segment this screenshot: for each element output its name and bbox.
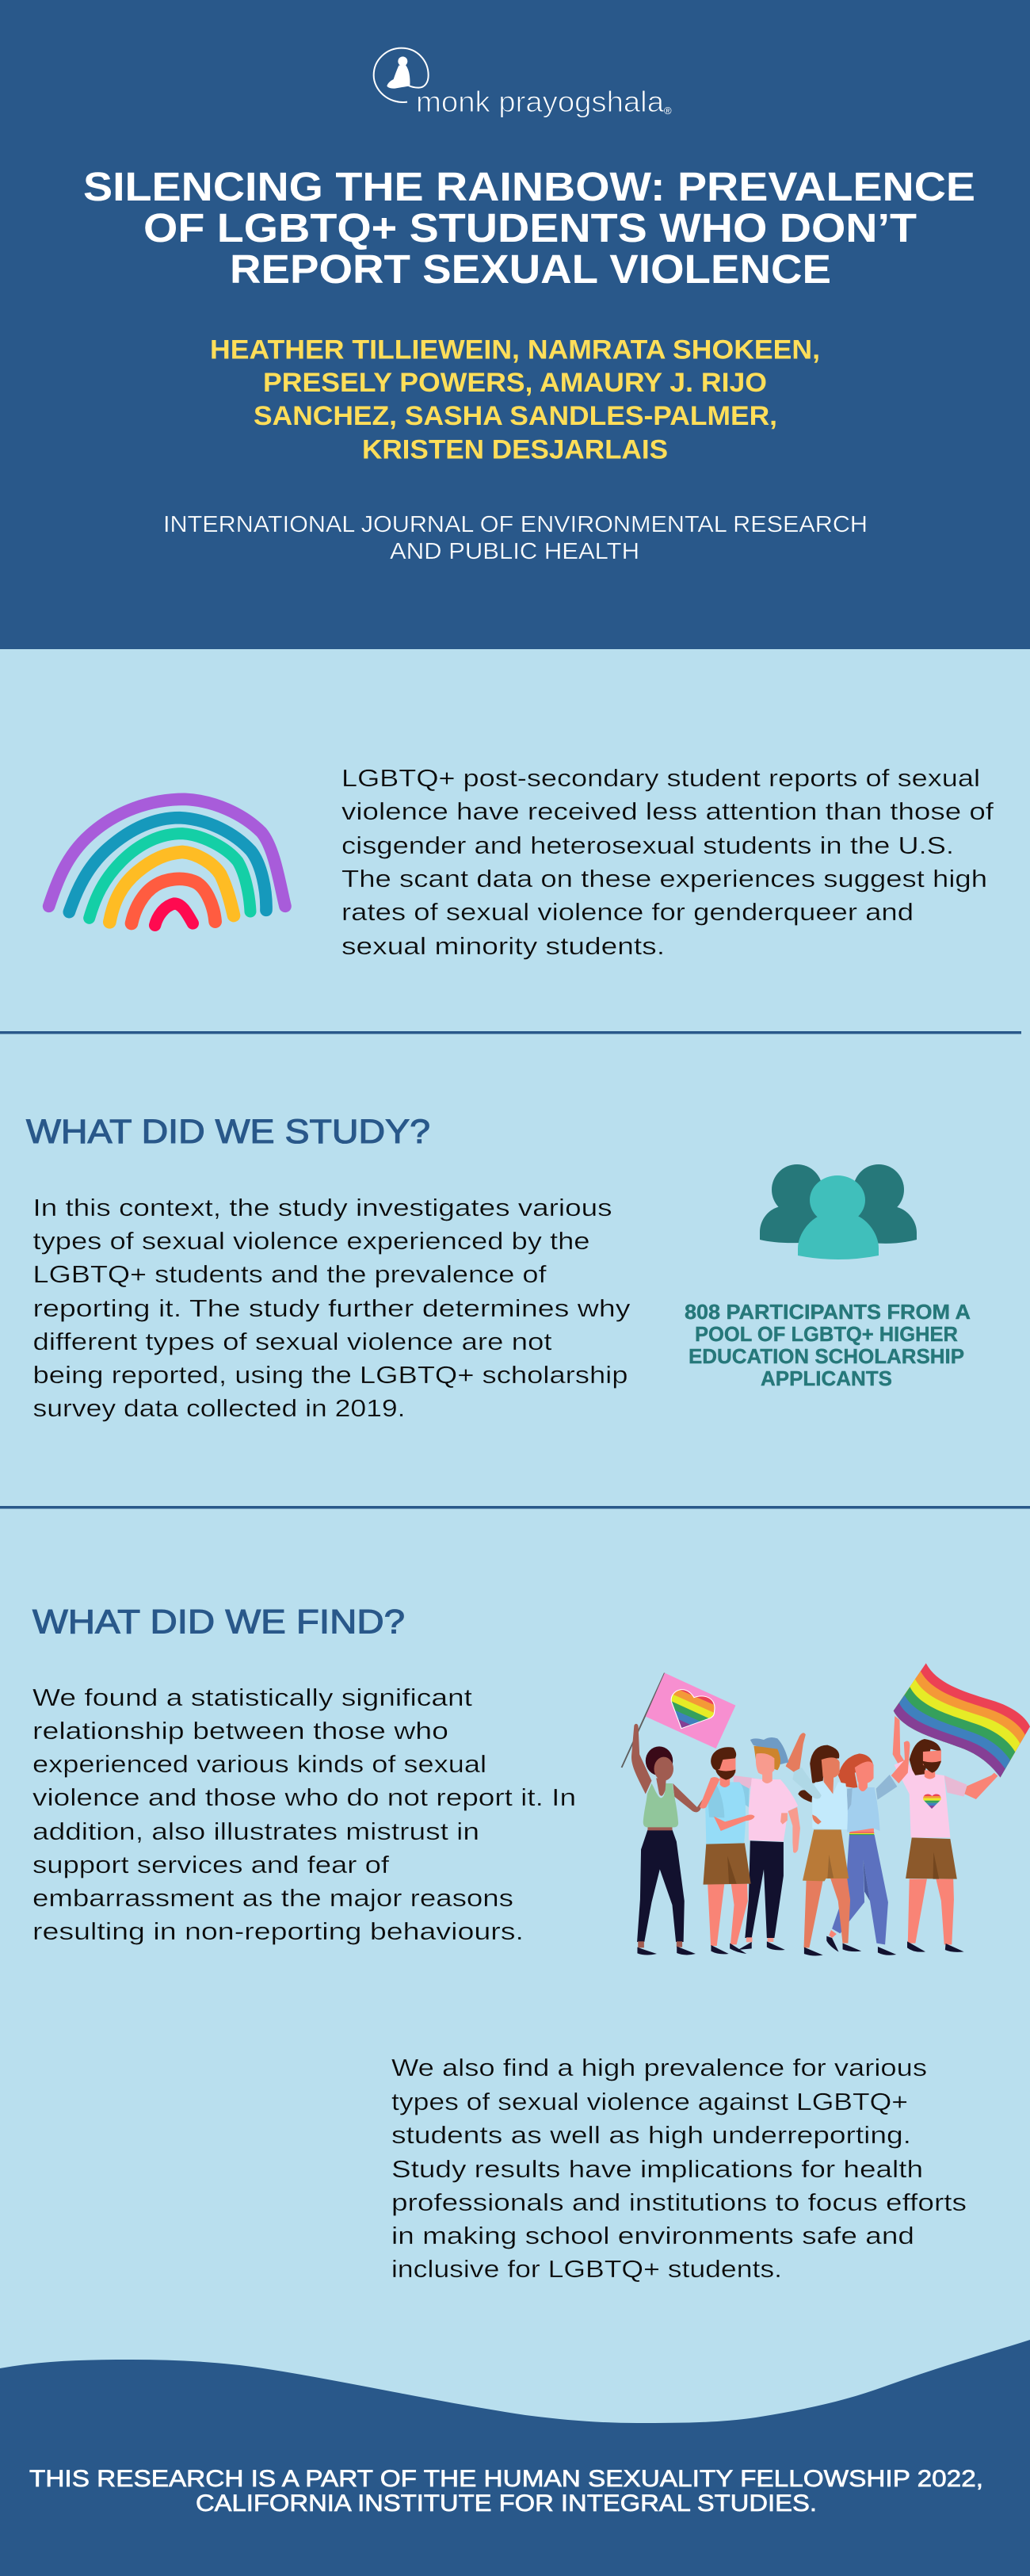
flag: rainbow (894, 1663, 1030, 1777)
caption: participants (685, 1300, 971, 1390)
title: REPORT SEXUAL VIOLENCE (230, 247, 831, 292)
logo: monk prayogshala: monk prayogshala (416, 86, 664, 118)
title: SILENCING THE RAINBOW: PREVALENCE (83, 164, 975, 209)
text block: introduction: rates of sexual violence for genderqueer and (341, 898, 914, 926)
text block: introduction: violence have received less attention than those of (341, 797, 994, 825)
title: OF LGBTQ+ STUDENTS WHO DON’T (143, 205, 917, 250)
icon: rainbow (49, 799, 285, 925)
panel: what did we study (26, 1114, 971, 1422)
text block: introduction (341, 764, 994, 960)
icon: meditating monk in circle (374, 48, 429, 102)
text block: findings: experienced various kinds of sexual (32, 1750, 486, 1778)
text block: study description: types of sexual violence experienced by the (33, 1227, 589, 1255)
journal name: AND PUBLIC HEALTH (390, 539, 639, 564)
text block: findings (32, 1684, 576, 1945)
icon: group of people (760, 1164, 917, 1259)
icon: small rainbow heart (923, 1794, 941, 1809)
text block: prevalence findings: in making school environments safe and (391, 2222, 914, 2249)
person: red-haired woman (826, 1741, 910, 1955)
text block: findings: support services and fear of (32, 1851, 389, 1878)
text block: prevalence findings: professionals and institutions to focus efforts (391, 2188, 967, 2216)
logo: monk prayogshala (374, 48, 672, 118)
text block: introduction: LGBTQ+ post-secondary student reports of sexual (341, 764, 980, 792)
text block: study description: different types of sexual violence are not (33, 1328, 552, 1355)
text block: prevalence findings: inclusive for LGBTQ+ students. (391, 2255, 782, 2283)
person: woman with pride heart flag (622, 1673, 735, 1955)
text block: prevalence findings (391, 2054, 967, 2283)
title (83, 164, 975, 292)
person: man holding rainbow flag (893, 1716, 998, 1952)
text block: study description (33, 1194, 631, 1422)
caption: participants: EDUCATION SCHOLARSHIP (689, 1344, 964, 1368)
caption: participants: 808 PARTICIPANTS FROM A (685, 1300, 971, 1324)
illustration: people with pride flags (622, 1663, 1030, 1956)
person: bearded man in blue shirt (703, 1747, 755, 1954)
text block: findings: embarrassment as the major reasons (32, 1884, 513, 1912)
text block: findings: violence and those who do not report it. In (32, 1783, 576, 1811)
text block: prevalence findings: types of sexual violence against LGBTQ+ (391, 2088, 908, 2115)
person: man with hat (734, 1737, 800, 1950)
authors: PRESELY POWERS, AMAURY J. RIJO (263, 368, 767, 398)
text block: study description: In this context, the study investigates various (33, 1194, 612, 1221)
text block: prevalence findings: students as well as high underreporting. (391, 2121, 911, 2149)
text block: findings: resulting in non-reporting behaviours. (32, 1917, 524, 1945)
panel: footer with wave (0, 2340, 1030, 2576)
authors (210, 334, 820, 464)
journal name (163, 512, 868, 564)
panel: introduction (49, 764, 994, 960)
text block: findings: We found a statistically significant (32, 1684, 472, 1711)
authors: HEATHER TILLIEWEIN, NAMRATA SHOKEEN, (210, 334, 820, 365)
person: woman with shorts (786, 1733, 861, 1956)
text block: study description: LGBTQ+ students and the prevalence of (33, 1260, 547, 1288)
logo: monk prayogshala: ® (664, 105, 672, 117)
text block: study description: being reported, using the LGBTQ+ scholarship (33, 1361, 628, 1389)
text block: study description: survey data collected in 2019. (33, 1394, 406, 1422)
text block: introduction: The scant data on these experiences suggest high (341, 865, 987, 892)
heading: what did we study: WHAT DID WE STUDY? (26, 1114, 430, 1151)
text block: fellowship note: THIS RESEARCH IS A PART OF THE HUMAN SEXUALITY FELLOWSHIP 2022, (29, 2466, 983, 2492)
panel: header (0, 0, 1030, 649)
journal name: INTERNATIONAL JOURNAL OF ENVIRONMENTAL RESEARCH (163, 512, 868, 537)
text block: prevalence findings: Study results have implications for health (391, 2155, 923, 2183)
panel: what did we find (32, 1604, 1030, 2283)
flag: pink with rainbow heart (622, 1673, 735, 1768)
caption: participants: POOL OF LGBTQ+ HIGHER (695, 1322, 958, 1346)
authors: KRISTEN DESJARLAIS (362, 434, 668, 464)
text block: study description: reporting it. The study further determines why (33, 1294, 631, 1322)
text block: fellowship note (29, 2466, 983, 2517)
text block: findings: addition, also illustrates mistrust in (32, 1817, 479, 1845)
heading: what did we find: WHAT DID WE FIND? (32, 1604, 405, 1641)
authors: SANCHEZ, SASHA SANDLES-PALMER, (254, 401, 777, 431)
text block: introduction: sexual minority students. (341, 932, 665, 960)
text block: findings: relationship between those who (32, 1717, 448, 1745)
caption: participants: APPLICANTS (761, 1366, 892, 1390)
text block: prevalence findings: We also find a high prevalence for various (391, 2054, 927, 2081)
text block: fellowship note: CALIFORNIA INSTITUTE FOR INTEGRAL STUDIES. (196, 2490, 817, 2517)
text block: introduction: cisgender and heterosexual students in the U.S. (341, 831, 954, 859)
